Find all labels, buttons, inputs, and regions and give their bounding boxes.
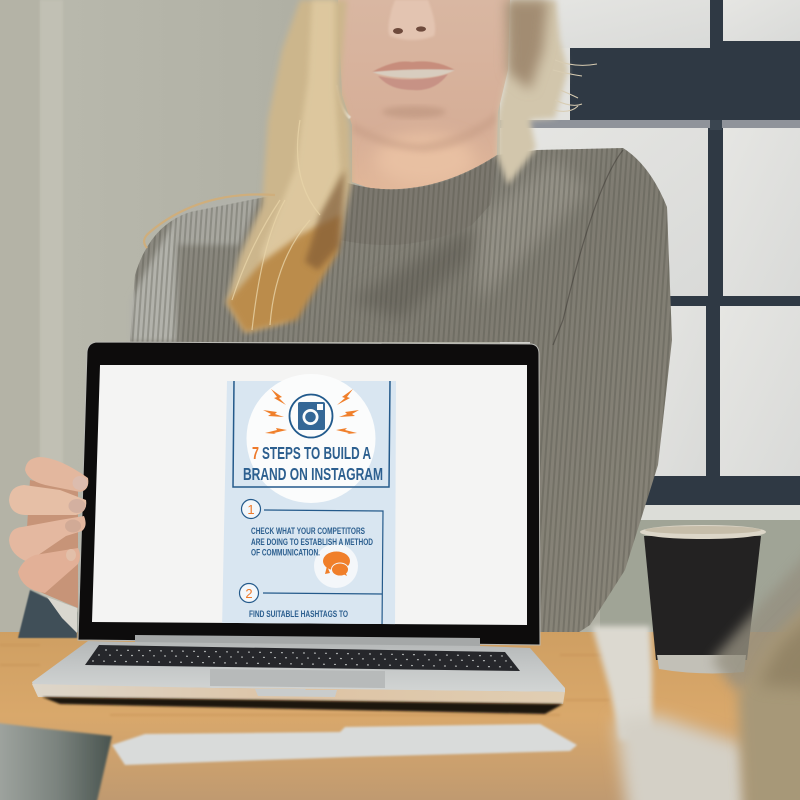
keyboard — [85, 645, 520, 671]
step 1 text — [251, 528, 373, 556]
white header circle — [246, 374, 376, 503]
blurred foreground object — [712, 530, 800, 800]
step 1 badge — [242, 500, 260, 518]
title frame — [233, 381, 390, 487]
wall below window — [600, 505, 800, 635]
laptop — [32, 342, 565, 704]
title text: BRAND ON INSTAGRAM — [243, 464, 383, 484]
laptop base — [32, 641, 565, 692]
coffee cup — [640, 525, 766, 673]
table glare — [592, 626, 750, 800]
laptop hinge — [135, 635, 480, 649]
icon: instagram logo — [290, 394, 332, 438]
laptop shadow — [42, 697, 563, 714]
step 2 badge: 2 — [245, 586, 253, 601]
step connector lines — [263, 510, 383, 630]
hand holding laptop — [9, 457, 88, 608]
neck and face — [336, 0, 510, 198]
sweater — [130, 148, 672, 638]
table — [0, 626, 800, 800]
title text: STEPS TO BUILD A — [262, 443, 371, 463]
right hair lock — [497, 0, 597, 185]
step 2 badge — [240, 584, 258, 602]
hair strand over shoulder — [144, 194, 275, 248]
sweater collar — [338, 155, 498, 245]
laptop front edge — [32, 684, 565, 704]
hair — [144, 0, 597, 332]
step 2 text: FIND SUITABLE HASHTAGS TO — [249, 609, 348, 620]
laptop screen — [92, 365, 527, 625]
trackpad — [210, 669, 385, 688]
title text — [244, 447, 382, 480]
smile — [372, 61, 455, 90]
left sleeve — [18, 590, 77, 638]
infographic panel — [222, 381, 396, 630]
title text: 7 — [252, 443, 259, 463]
laptop lid and bezel — [78, 342, 540, 645]
icon: orange lightning bolts — [263, 389, 359, 434]
trackpad notch — [255, 689, 337, 697]
icon: speech bubbles — [314, 544, 358, 588]
window — [500, 0, 800, 516]
step 1 badge: 1 — [247, 502, 255, 517]
left hair lock — [226, 0, 352, 332]
table reflection — [0, 722, 112, 800]
nose — [388, 0, 435, 40]
background: wall — [0, 0, 800, 640]
white keyboard on table — [112, 724, 577, 765]
step 1 text: OF COMMUNICATION. — [251, 548, 320, 558]
step 1 text: ARE DOING TO ESTABLISH A METHOD — [251, 537, 373, 548]
infographic on screen — [222, 374, 396, 630]
step 1 text: CHECK WHAT YOUR COMPETITORS — [251, 526, 365, 537]
